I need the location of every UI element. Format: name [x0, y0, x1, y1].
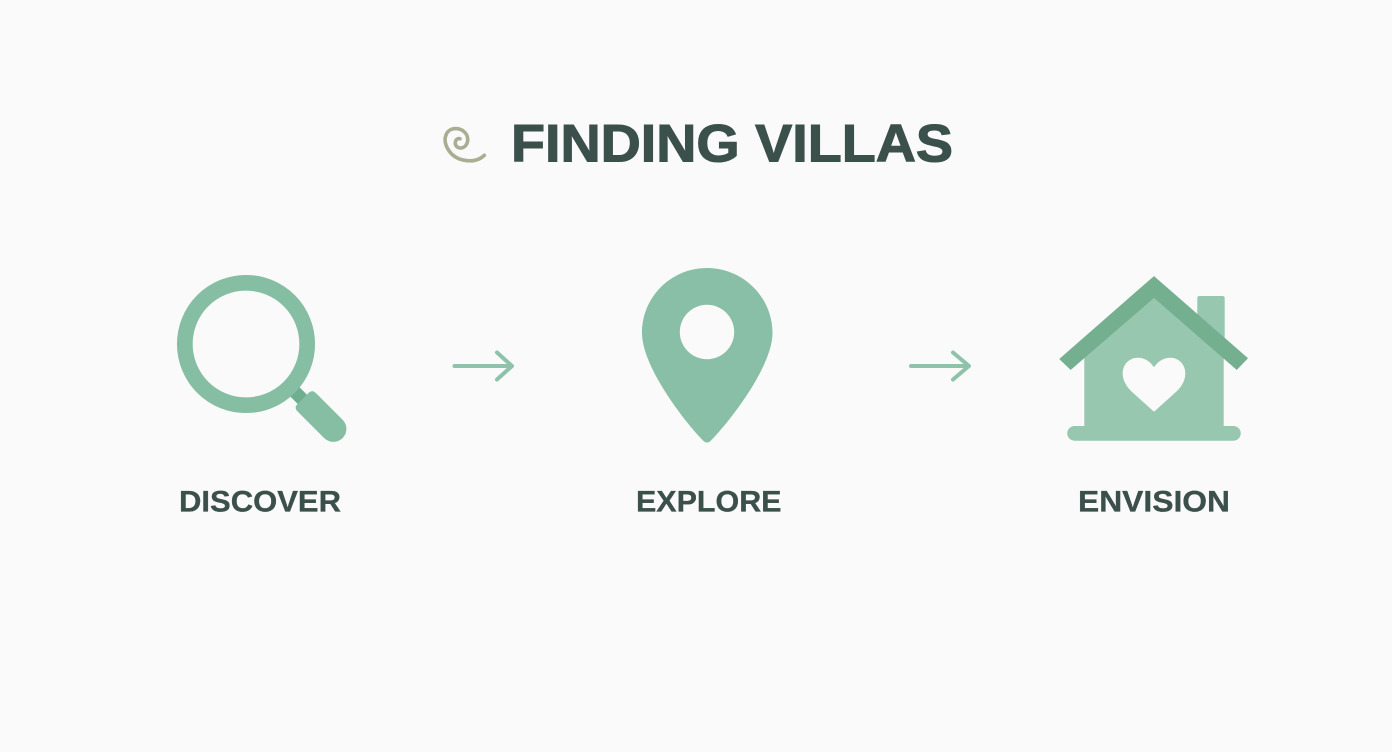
step: explore	[636, 268, 782, 518]
icon: house with heart	[1060, 277, 1247, 441]
label: discover: DISCOVER	[179, 486, 341, 518]
icon: magnifying glass	[185, 283, 352, 447]
label: explore: EXPLORE	[636, 486, 782, 518]
step: envision	[1060, 277, 1247, 518]
label: envision: ENVISION	[1078, 486, 1230, 518]
icon: map pin	[642, 268, 772, 442]
title: FINDING VILLAS	[511, 114, 953, 174]
step: discover	[179, 283, 352, 518]
icon: title spiral	[445, 129, 484, 161]
arrow: explore to envision	[911, 352, 969, 380]
arrow: discover to explore	[454, 352, 512, 380]
